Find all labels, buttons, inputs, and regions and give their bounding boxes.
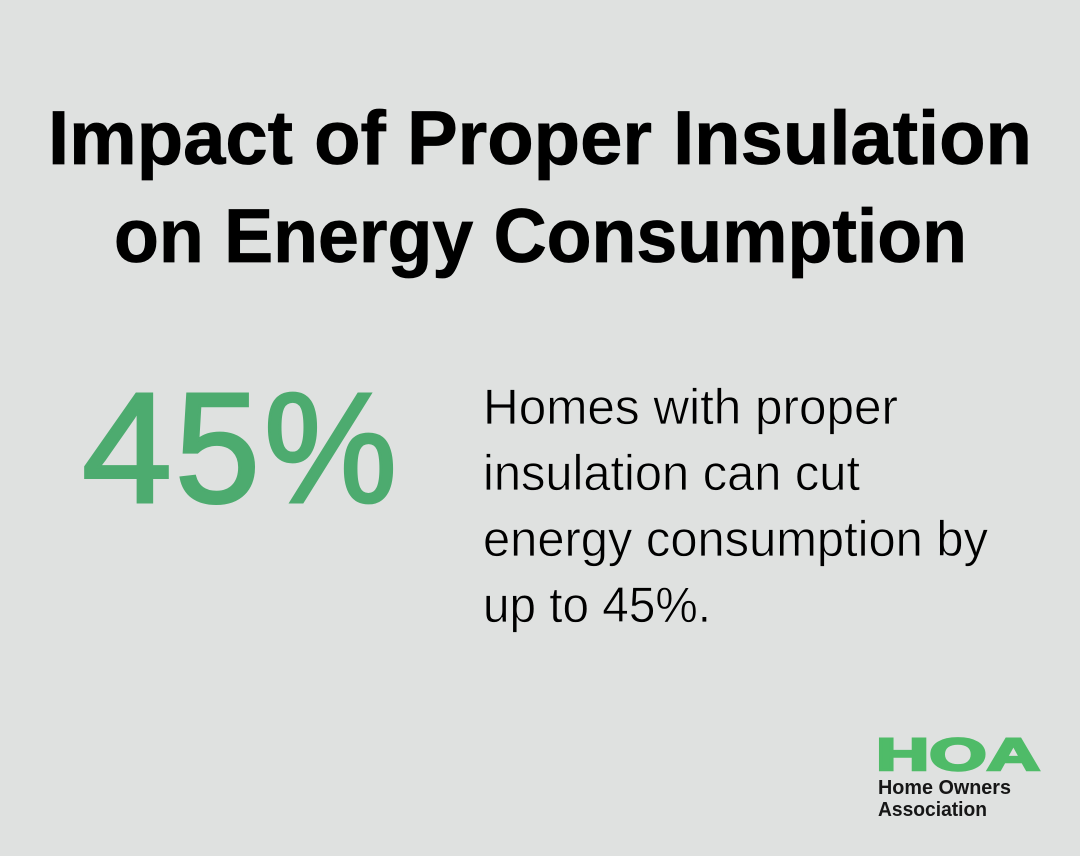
big statistic: 45%: 5: [175, 361, 260, 536]
logo text: Home Owners: Home Owners: [878, 777, 1011, 799]
description text: up to 45%.: [483, 577, 711, 633]
logo mark: HOA: HOA: [876, 729, 1040, 780]
title: on Energy Consumption: [114, 194, 967, 279]
description text: insulation can cut: [483, 445, 860, 501]
big statistic: 45%: 4: [82, 361, 172, 536]
big statistic: 45%: %: [264, 361, 397, 536]
description text: energy consumption by: [483, 511, 988, 567]
description text: [483, 379, 988, 633]
title: Impact of Proper Insulation: [48, 96, 1032, 181]
logo text: Association: Association: [878, 799, 987, 821]
title: [48, 96, 1032, 279]
logo: HOA Home Owners Association: [876, 729, 1040, 821]
description text: Homes with proper: [483, 379, 898, 435]
